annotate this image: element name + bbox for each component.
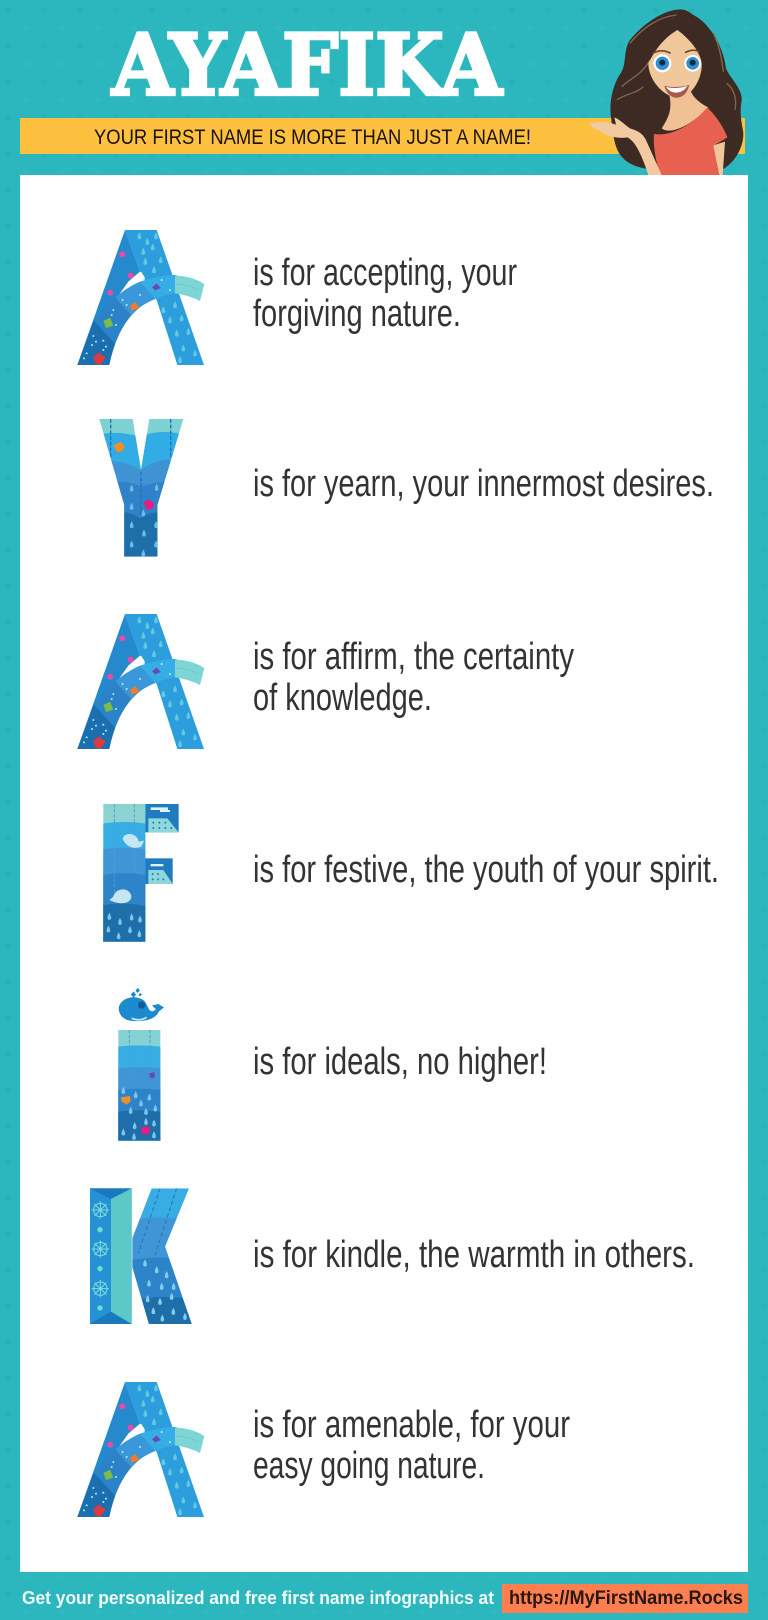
row 7: letter A [77, 1382, 204, 1517]
row 1: letter A [77, 230, 204, 365]
row 3 text: of knowledge. [253, 677, 432, 719]
footer [22, 1584, 748, 1613]
footer URL badge [502, 1584, 748, 1613]
icon: letter I with whale [118, 988, 164, 1141]
icon: letter F [103, 804, 179, 942]
subtitle banner: YOUR FIRST NAME IS MORE THAN JUST A NAME! [94, 125, 531, 149]
row 1 text [253, 252, 517, 335]
icon: letter A [77, 614, 204, 749]
row 1 text: is for accepting, your [253, 252, 517, 294]
footer text: Get your personalized and free first name infographics at [22, 1588, 494, 1608]
row 7 text [253, 1404, 570, 1487]
letter I body [118, 1030, 160, 1141]
icon: presenter woman [590, 9, 743, 175]
row 3 text [253, 636, 574, 719]
title: AYAFIKA [111, 16, 504, 114]
row 7 text: is for amenable, for your [253, 1404, 570, 1446]
icon: whale [119, 988, 164, 1021]
icon: letter A [77, 1382, 204, 1517]
row 3: letter A [77, 614, 204, 749]
row 5 text: is for ideals, no higher! [253, 1041, 547, 1083]
icon: letter K [90, 1187, 193, 1325]
footer URL badge: https://MyFirstName.Rocks [509, 1588, 743, 1609]
row 1 text: forgiving nature. [253, 293, 461, 335]
row 7 text: easy going nature. [253, 1445, 485, 1487]
subtitle banner [20, 118, 745, 154]
icon: letter Y [97, 418, 187, 558]
icon: letter A [77, 230, 204, 365]
row 3 text: is for affirm, the certainty [253, 636, 574, 678]
